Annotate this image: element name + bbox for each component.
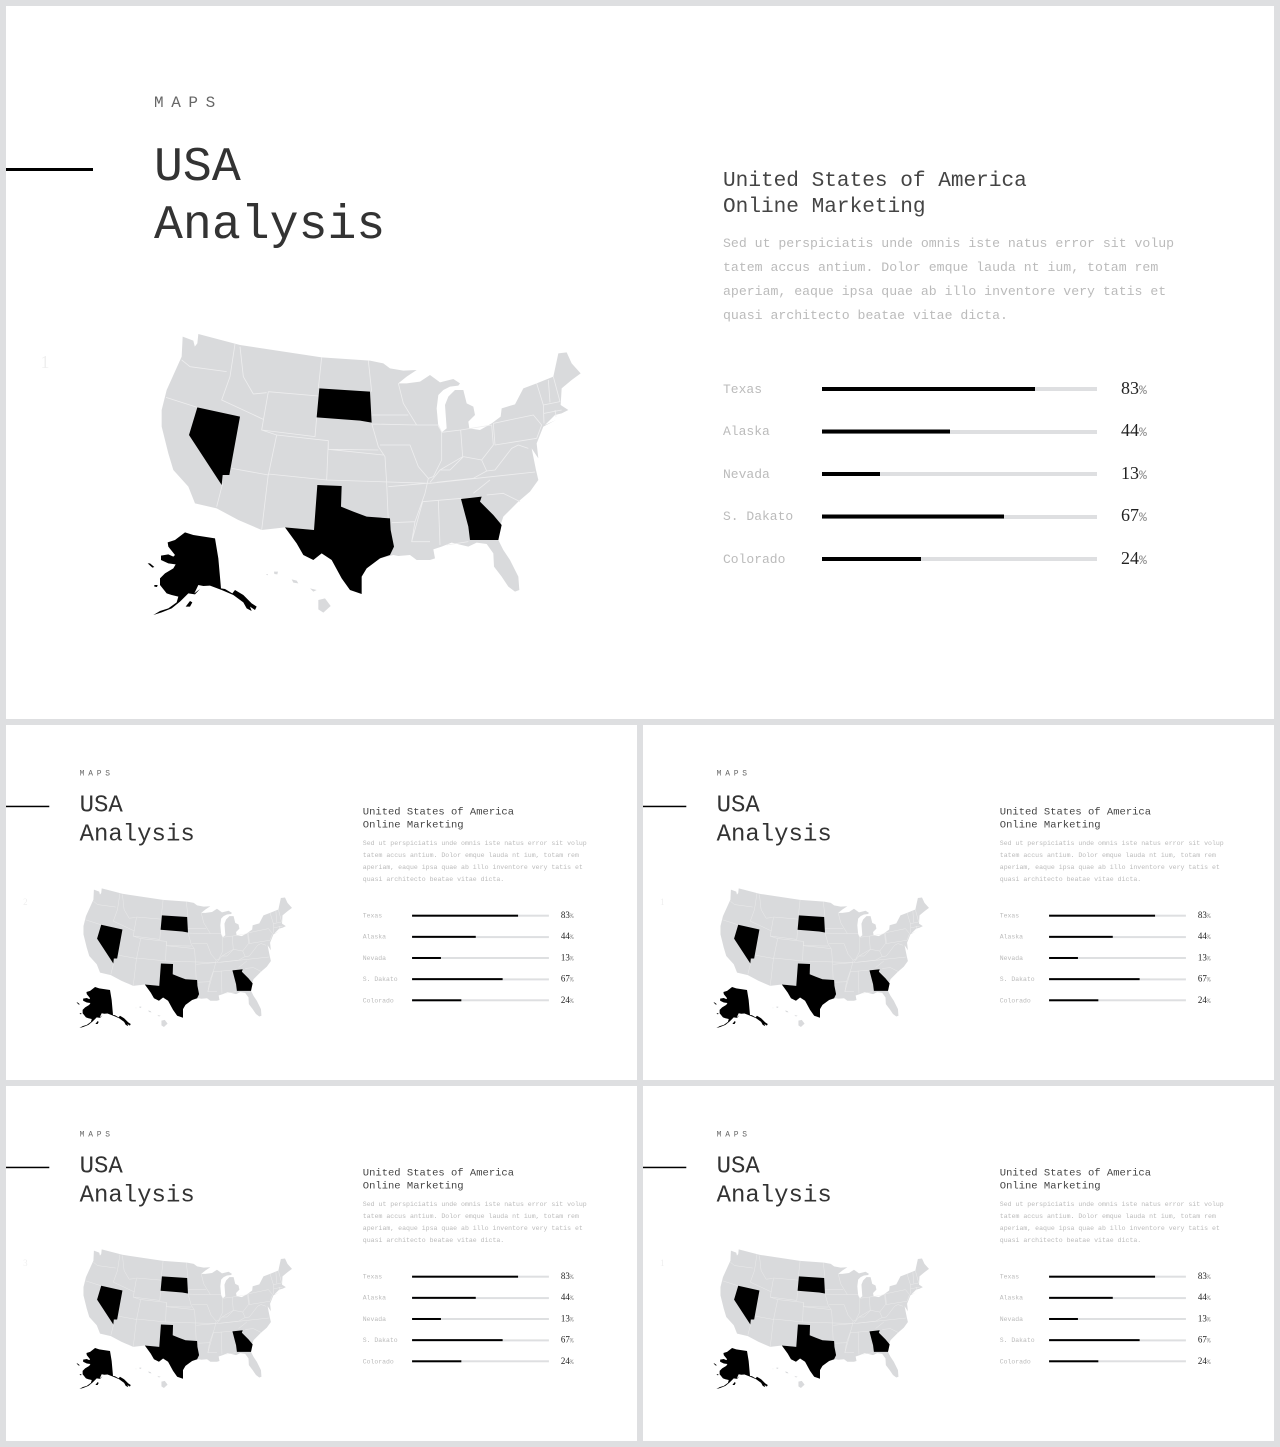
- panel: thumbnail slide 5: Texas: [1000, 1274, 1019, 1281]
- paragraph: tatem accus antium. Dolor emque lauda nt ium, totam rem: [723, 260, 1158, 275]
- panel: thumbnail slide 5: 13%: [1198, 1313, 1211, 1323]
- panel: thumbnail slide 2: [6, 725, 637, 1080]
- panel: thumbnail slide 2: 2: [23, 897, 28, 907]
- bar chart: 44%: [1121, 420, 1147, 440]
- bar chart: Colorado: [723, 552, 785, 567]
- panel: thumbnail slide 2: United States of America: [363, 807, 514, 819]
- panel: thumbnail slide 5: 83%: [1198, 1271, 1211, 1281]
- panel: thumbnail slide 4: S. Dakato: [363, 1337, 398, 1344]
- panel: thumbnail slide 2: quasi architecto beatae vitae dicta.: [363, 876, 504, 883]
- panel: thumbnail slide 5: quasi architecto beatae vitae dicta.: [1000, 1237, 1141, 1244]
- panel: thumbnail slide 2: Alaska: [363, 934, 386, 941]
- panel: thumbnail slide 4: 13%: [561, 1313, 574, 1323]
- panel: thumbnail slide 4: Sed ut perspiciatis unde omnis iste natus error sit volup: [363, 1201, 587, 1208]
- panel: thumbnail slide 3: [643, 725, 1274, 1080]
- panel: thumbnail slide 5: 1: [660, 1258, 665, 1268]
- panel: thumbnail slide 4: 67%: [561, 1334, 574, 1344]
- panel: thumbnail slide 2: Online Marketing: [363, 820, 464, 832]
- title: Analysis: [154, 199, 385, 253]
- panel: thumbnail slide 2: Nevada: [363, 955, 386, 962]
- panel: thumbnail slide 2: 67%: [561, 973, 574, 983]
- panel: thumbnail slide 2: 24%: [561, 995, 574, 1005]
- panel: thumbnail slide 4: 24%: [561, 1356, 574, 1366]
- panel: thumbnail slide 3: 1: [660, 897, 665, 907]
- panel: thumbnail slide 2: Sed ut perspiciatis unde omnis iste natus error sit volup: [363, 840, 587, 847]
- panel: thumbnail slide 3: aperiam, eaque ipsa quae ab illo inventore very tatis et: [1000, 864, 1220, 871]
- panel: thumbnail slide 5: MAPS: [717, 1130, 751, 1139]
- panel: thumbnail slide 3: United States of America: [1000, 807, 1151, 819]
- panel: thumbnail slide 4: USA: [80, 1154, 123, 1181]
- paragraph: quasi architecto beatae vitae dicta.: [723, 308, 1008, 323]
- panel: thumbnail slide 4: Colorado: [363, 1358, 394, 1365]
- panel: thumbnail slide 2: tatem accus antium. Dolor emque lauda nt ium, totam rem: [363, 852, 579, 859]
- panel: thumbnail slide 3: S. Dakato: [1000, 976, 1035, 983]
- title: USA: [154, 141, 241, 195]
- panel: thumbnail slide 2: 83%: [561, 910, 574, 920]
- panel: thumbnail slide 5: United States of America: [1000, 1168, 1151, 1180]
- panel: thumbnail slide 5: Analysis: [717, 1183, 832, 1210]
- panel: thumbnail slide 5: 44%: [1198, 1292, 1211, 1302]
- panel: thumbnail slide 4: 83%: [561, 1271, 574, 1281]
- panel: thumbnail slide 5: Sed ut perspiciatis unde omnis iste natus error sit volup: [1000, 1201, 1224, 1208]
- panel: thumbnail slide 3: 44%: [1198, 931, 1211, 941]
- panel: thumbnail slide 2: S. Dakato: [363, 976, 398, 983]
- panel: thumbnail slide 2: Colorado: [363, 997, 394, 1004]
- panel: thumbnail slide 5: Nevada: [1000, 1316, 1023, 1323]
- bar chart: S. Dakato: [723, 509, 793, 524]
- panel: thumbnail slide 3: Colorado: [1000, 997, 1031, 1004]
- panel: thumbnail slide 2: Analysis: [80, 822, 195, 849]
- panel: thumbnail slide 5: aperiam, eaque ipsa quae ab illo inventore very tatis et: [1000, 1225, 1220, 1232]
- panel: thumbnail slide 5: S. Dakato: [1000, 1337, 1035, 1344]
- bar chart: Texas: [723, 382, 762, 397]
- panel: thumbnail slide 3: USA: [717, 793, 760, 820]
- panel: thumbnail slide 3: 24%: [1198, 995, 1211, 1005]
- panel: thumbnail slide 2: Texas: [363, 913, 382, 920]
- panel: thumbnail slide 2: 13%: [561, 952, 574, 962]
- panel: thumbnail slide 4: tatem accus antium. Dolor emque lauda nt ium, totam rem: [363, 1213, 579, 1220]
- panel: thumbnail slide 4: quasi architecto beatae vitae dicta.: [363, 1237, 504, 1244]
- panel: thumbnail slide 5: Colorado: [1000, 1358, 1031, 1365]
- panel: thumbnail slide 4: aperiam, eaque ipsa quae ab illo inventore very tatis et: [363, 1225, 583, 1232]
- paragraph: aperiam, eaque ipsa quae ab illo inventore very tatis et: [723, 284, 1166, 299]
- bar chart: Nevada: [723, 467, 770, 482]
- panel: main slide: [6, 6, 1274, 719]
- panel: thumbnail slide 3: 67%: [1198, 973, 1211, 983]
- panel: thumbnail slide 5: 67%: [1198, 1334, 1211, 1344]
- map of USA: [148, 334, 581, 615]
- panel: thumbnail slide 2: USA: [80, 793, 123, 820]
- slide number: 1: [40, 352, 50, 372]
- accent line: [6, 168, 93, 171]
- subheading: Online Marketing: [723, 195, 926, 219]
- panel: thumbnail slide 5: USA: [717, 1154, 760, 1181]
- panel: thumbnail slide 5: Online Marketing: [1000, 1181, 1101, 1193]
- panel: thumbnail slide 5: [643, 1086, 1274, 1441]
- panel: thumbnail slide 4: Texas: [363, 1274, 382, 1281]
- panel: thumbnail slide 3: Online Marketing: [1000, 820, 1101, 832]
- paragraph: Sed ut perspiciatis unde omnis iste natus error sit volup: [723, 236, 1174, 251]
- panel: thumbnail slide 3: Alaska: [1000, 934, 1023, 941]
- bar chart: 24%: [1121, 548, 1147, 568]
- panel: thumbnail slide 4: MAPS: [80, 1130, 114, 1139]
- bar chart: 67%: [1121, 505, 1147, 525]
- bar chart: [723, 378, 1147, 568]
- panel: thumbnail slide 5: Alaska: [1000, 1295, 1023, 1302]
- panel: thumbnail slide 3: Analysis: [717, 822, 832, 849]
- panel: thumbnail slide 4: Online Marketing: [363, 1181, 464, 1193]
- panel: thumbnail slide 3: tatem accus antium. Dolor emque lauda nt ium, totam rem: [1000, 852, 1216, 859]
- subheading: United States of America: [723, 169, 1027, 193]
- panel: thumbnail slide 2: 44%: [561, 931, 574, 941]
- bar chart: 13%: [1121, 463, 1147, 483]
- bar chart: 83%: [1121, 378, 1147, 398]
- panel: thumbnail slide 3: 13%: [1198, 952, 1211, 962]
- panel: thumbnail slide 4: Analysis: [80, 1183, 195, 1210]
- panel: thumbnail slide 5: 24%: [1198, 1356, 1211, 1366]
- panel: thumbnail slide 4: Nevada: [363, 1316, 386, 1323]
- panel: thumbnail slide 4: United States of America: [363, 1168, 514, 1180]
- panel: thumbnail slide 3: Nevada: [1000, 955, 1023, 962]
- eyebrow: MAPS: MAPS: [154, 94, 223, 112]
- panel: thumbnail slide 2: aperiam, eaque ipsa quae ab illo inventore very tatis et: [363, 864, 583, 871]
- panel: thumbnail slide 3: quasi architecto beatae vitae dicta.: [1000, 876, 1141, 883]
- panel: thumbnail slide 3: Texas: [1000, 913, 1019, 920]
- panel: thumbnail slide 4: [6, 1086, 637, 1441]
- panel: thumbnail slide 3: MAPS: [717, 769, 751, 778]
- bar chart: Alaska: [723, 424, 770, 439]
- panel: thumbnail slide 4: Alaska: [363, 1295, 386, 1302]
- panel: thumbnail slide 3: 83%: [1198, 910, 1211, 920]
- panel: thumbnail slide 4: 3: [23, 1258, 28, 1268]
- panel: thumbnail slide 5: tatem accus antium. Dolor emque lauda nt ium, totam rem: [1000, 1213, 1216, 1220]
- panel: thumbnail slide 2: MAPS: [80, 769, 114, 778]
- panel: thumbnail slide 3: Sed ut perspiciatis unde omnis iste natus error sit volup: [1000, 840, 1224, 847]
- panel: thumbnail slide 4: 44%: [561, 1292, 574, 1302]
